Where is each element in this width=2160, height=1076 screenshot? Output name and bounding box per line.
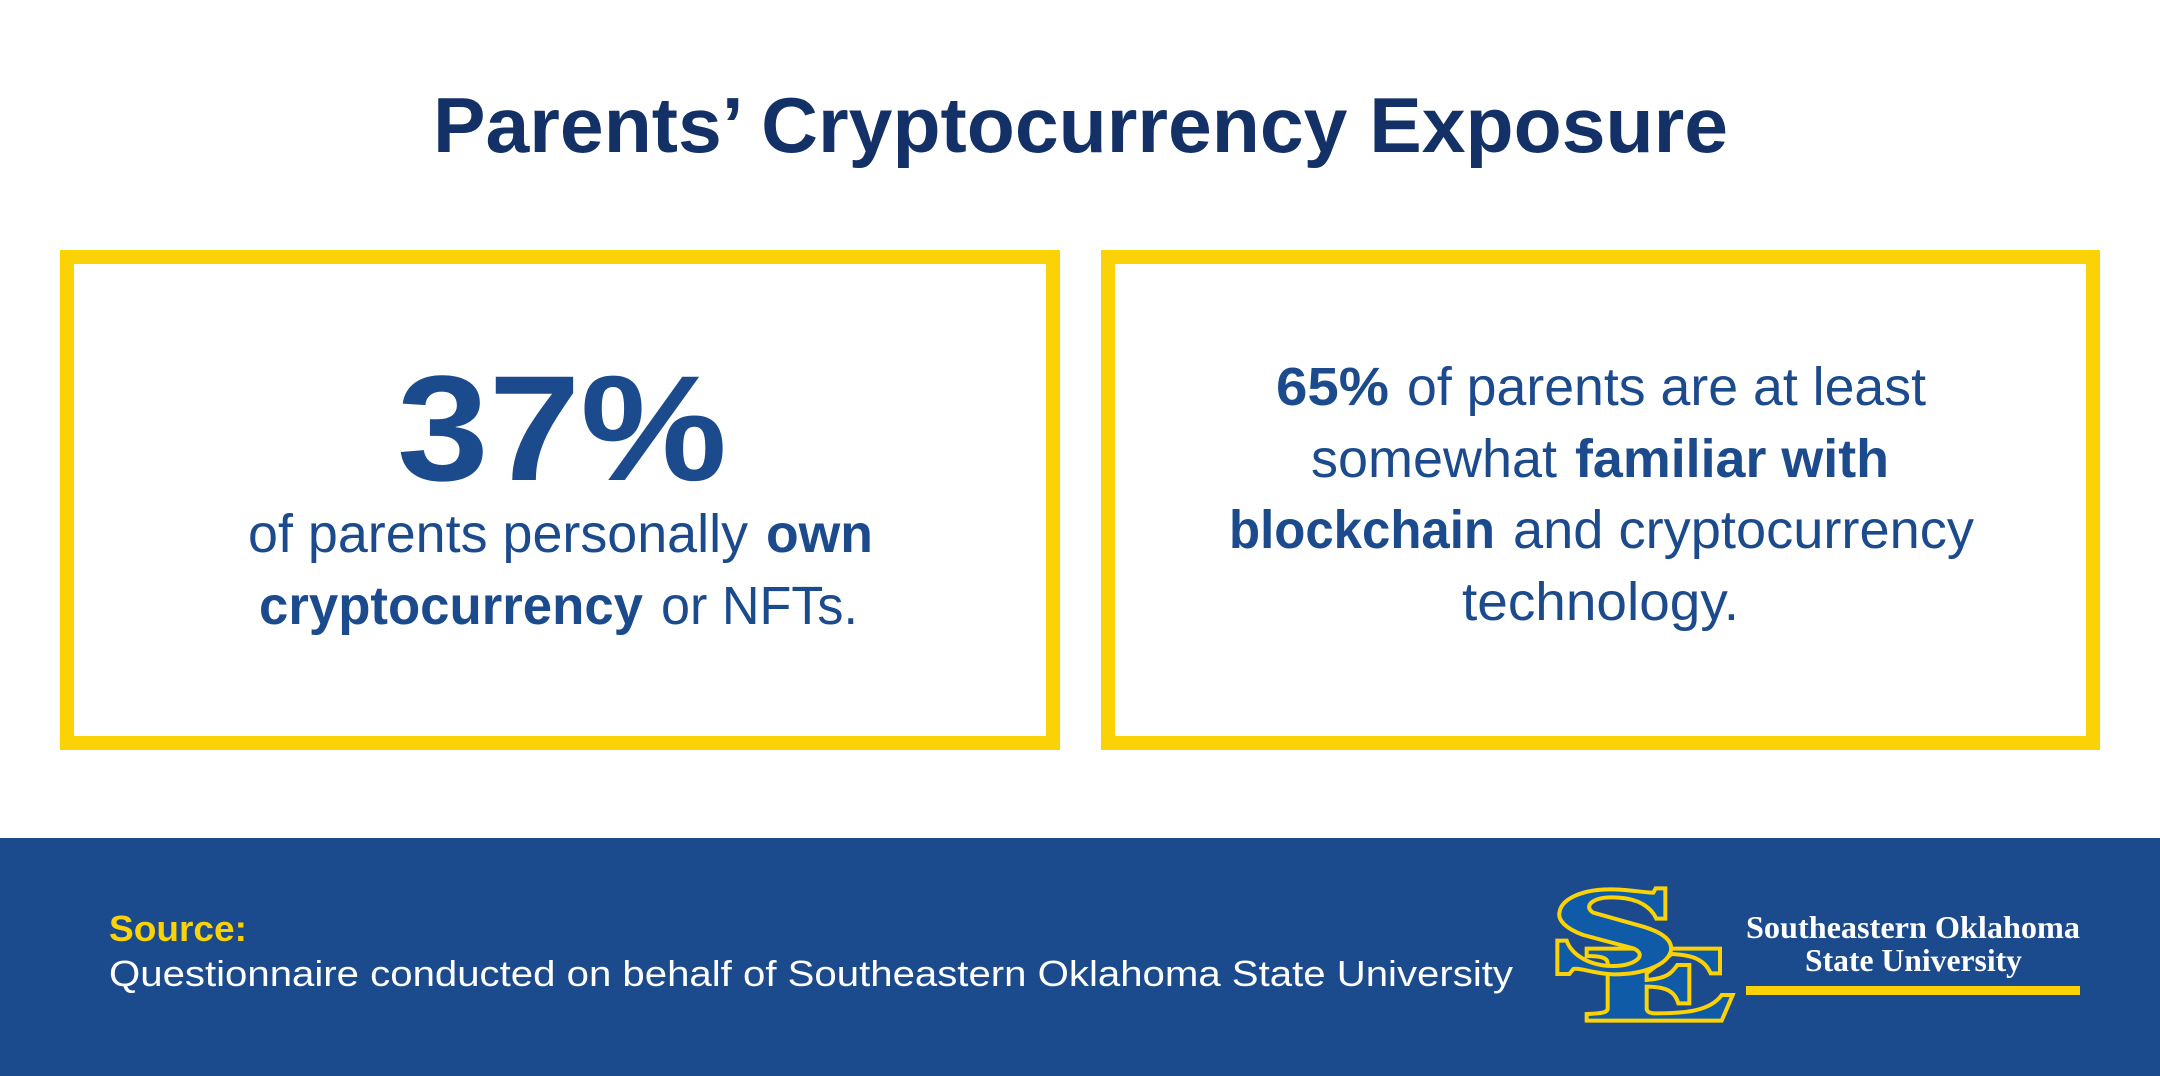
statistic text	[1229, 357, 1974, 632]
statistic description: own	[766, 504, 873, 564]
icon: SE university logo	[1557, 888, 1733, 1021]
footer band	[0, 838, 2160, 1076]
source text: Questionnaire conducted on behalf of Southeastern Oklahoma State University	[109, 953, 1513, 994]
statistic description: cryptocurrency	[259, 576, 643, 636]
big statistic: 37%	[397, 344, 727, 512]
statistic text: of parents are at least	[1407, 357, 1926, 417]
statistic text: and cryptocurrency	[1513, 500, 1974, 560]
panel border	[1108, 257, 2093, 743]
statistic text: technology.	[1462, 572, 1739, 632]
statistic description: of parents personally	[248, 504, 748, 564]
panel: 37% of parents own crypto	[67, 257, 1053, 743]
title: Parents’ Cryptocurrency Exposure	[433, 81, 1728, 169]
university wordmark	[1746, 909, 2080, 995]
university wordmark: Southeastern Oklahoma	[1746, 909, 2080, 945]
statistic text: somewhat	[1311, 429, 1557, 489]
panel: 65% familiar with blockchain	[1108, 257, 2093, 743]
statistic text: blockchain	[1229, 500, 1495, 560]
statistic text: 65%	[1276, 357, 1389, 417]
university wordmark: State University	[1805, 942, 2022, 978]
panel border	[67, 257, 1053, 743]
statistic description: or NFTs.	[661, 576, 858, 636]
source label: Source:	[109, 908, 247, 949]
statistic text: familiar with	[1575, 429, 1889, 489]
statistic description	[248, 504, 873, 636]
